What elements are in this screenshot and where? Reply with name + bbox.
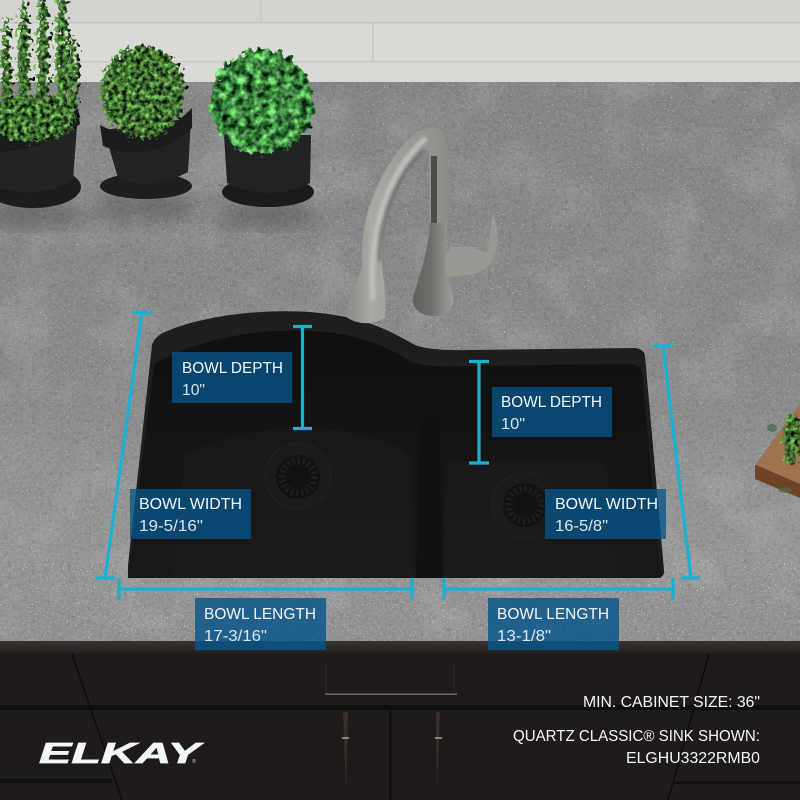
dimension: left bowl depth	[293, 326, 312, 428]
dimension: right bowl depth	[469, 361, 489, 463]
faucet spout	[345, 128, 448, 323]
label: left bowl depth: 10"	[182, 382, 205, 399]
model note: QUARTZ CLASSIC® SINK SHOWN:	[513, 728, 760, 745]
cabinets	[0, 653, 800, 800]
dimension: left bowl length	[119, 578, 412, 600]
label: left bowl width	[130, 489, 251, 539]
label: right bowl depth: 10"	[501, 416, 525, 433]
label: right bowl width	[545, 489, 666, 539]
plant shadows on the counter	[0, 193, 320, 229]
logo: Elkay: ELKAY	[39, 738, 204, 770]
dimension: left bowl width	[96, 312, 152, 578]
door handles	[342, 712, 442, 790]
plant: ivy ball in black pot	[210, 50, 314, 207]
label: left bowl depth	[172, 352, 292, 403]
drawer pull	[325, 665, 457, 695]
sink: black granite double bowl	[128, 311, 664, 578]
label: right bowl length: 13-1/8"	[497, 628, 551, 645]
label: left bowl length: BOWL LENGTH	[204, 606, 316, 623]
sink rim	[128, 311, 664, 578]
countertop: grey granite	[0, 82, 800, 642]
model note	[513, 728, 760, 767]
label: right bowl depth: BOWL DEPTH	[501, 394, 602, 411]
label: left bowl width: 19-5/16"	[139, 518, 203, 535]
counter front edge	[0, 641, 800, 655]
dimension: right bowl length	[444, 578, 673, 600]
bowl divider	[416, 415, 443, 578]
faucet body	[413, 223, 453, 316]
dimension: right bowl width	[653, 346, 700, 578]
plant: rosemary in black pot	[0, 0, 81, 208]
label: right bowl width: BOWL WIDTH	[555, 496, 658, 513]
right bowl floor	[446, 460, 618, 578]
right drain	[492, 472, 558, 538]
logo: Elkay: ®	[192, 758, 196, 765]
label: right bowl length	[488, 598, 619, 650]
floor: light wood planks	[0, 0, 800, 84]
model note: ELGHU3322RMB0	[626, 750, 760, 767]
bowl interior	[128, 330, 661, 578]
faucet: brushed nickel	[345, 128, 497, 323]
label: right bowl width: 16-5/8"	[555, 518, 608, 535]
label: left bowl length: 17-3/16"	[204, 628, 267, 645]
label: left bowl length	[195, 598, 326, 650]
cutting board with herbs	[755, 404, 800, 498]
label: left bowl depth: BOWL DEPTH	[182, 360, 283, 377]
label: left bowl width: BOWL WIDTH	[139, 496, 242, 513]
plant: parsley in black pot	[100, 46, 192, 199]
cabinet size note: MIN. CABINET SIZE: 36"	[583, 694, 760, 711]
left bowl floor	[172, 428, 412, 578]
faucet handle	[445, 213, 497, 277]
logo: Elkay	[39, 738, 204, 770]
left drain	[265, 443, 331, 509]
label: right bowl depth	[492, 387, 612, 437]
label: right bowl length: BOWL LENGTH	[497, 606, 609, 623]
